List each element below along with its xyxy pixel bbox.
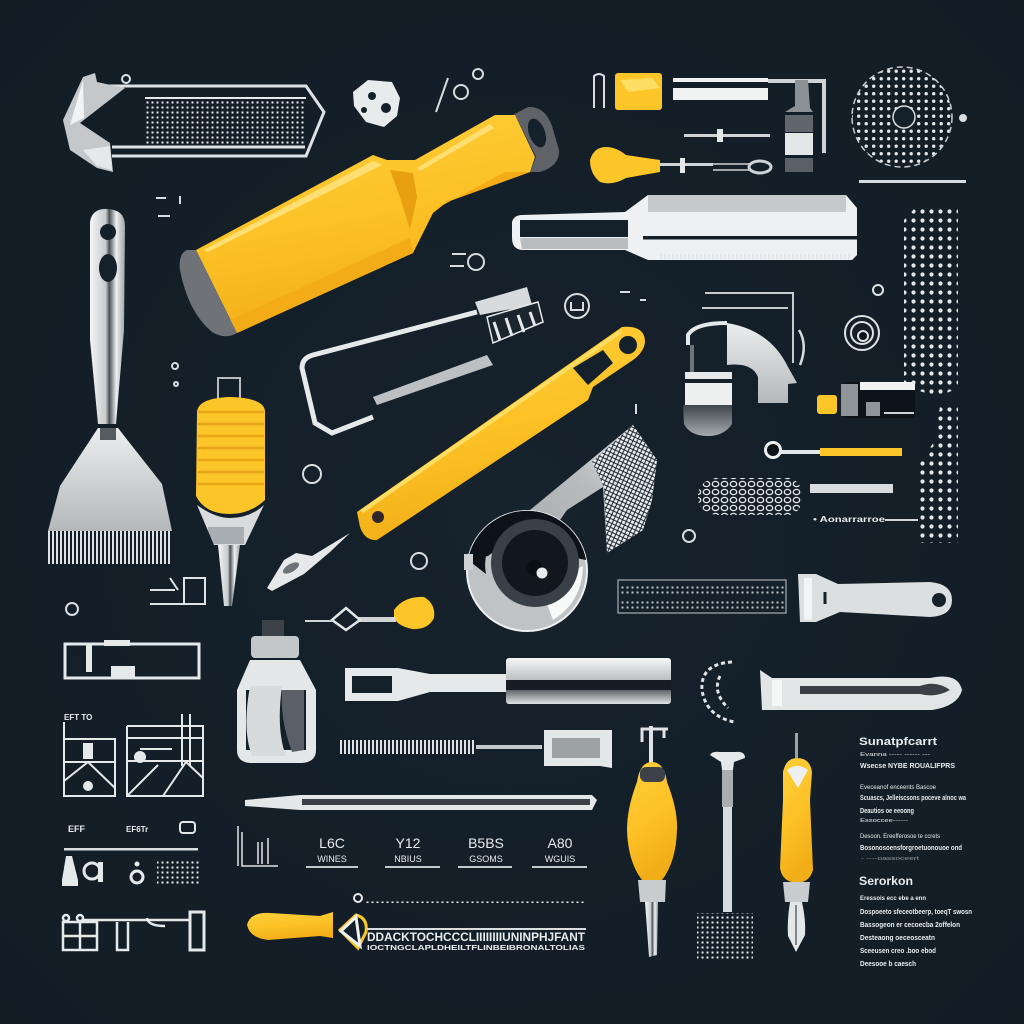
- text block: right column upper: Essoccee------: [860, 818, 908, 824]
- tool: scraper with loop: [798, 574, 952, 622]
- tool: yellow short handle with wedge: [247, 912, 586, 952]
- icon: small gear cluster: [353, 80, 400, 127]
- icon: coiled spring: [702, 662, 734, 722]
- small marks middle: [66, 196, 695, 615]
- stat 2: Y12: [396, 835, 421, 851]
- stat 4: A80: [548, 835, 573, 851]
- stat 4: [532, 835, 587, 868]
- tool: yellow grip tool B: [780, 733, 813, 952]
- stat 1: WINES: [317, 854, 347, 864]
- stat 2: NBIUS: [394, 854, 422, 864]
- text block: right column lower: Sceeusen creo .boo ebod: [860, 948, 936, 955]
- tool: small parts row: [590, 129, 771, 183]
- text block: right column upper: [859, 736, 966, 862]
- stat 4: WGUIS: [545, 854, 575, 864]
- stat 1: L6C: [319, 835, 345, 851]
- label: diagram caption: EFT TO: [64, 713, 92, 722]
- tool: bristle roller: • Aonarrarroe: [813, 515, 886, 524]
- icon row: legend chart: [62, 822, 200, 886]
- legend header icons: [64, 822, 198, 850]
- legend header icons: EFF: [68, 824, 86, 834]
- text block: right column upper: Desoon. Ereefferosoe te ccrets: [860, 833, 941, 840]
- diagrams: sketched frames: [64, 714, 203, 796]
- tool: long thin file: [245, 795, 597, 810]
- stat 2: [385, 835, 440, 868]
- tool: halftone vertical strips: [904, 208, 958, 543]
- tool: vertical metal spatula: [48, 209, 172, 564]
- text block: right column upper: Sunatpfcarrt: [859, 736, 937, 748]
- tool: yellow bulb probe: [305, 597, 434, 630]
- divider line: [859, 180, 966, 183]
- tool: long yellow handled knife: [357, 327, 645, 540]
- stat 3: B5BS: [468, 835, 504, 851]
- text block: right column lower: [859, 874, 972, 968]
- text block: right column lower: Dospoeeto sfeceotbeerp, toeqT swosn: [860, 909, 972, 916]
- text block: right column lower: Eressois ecc ebe a enn: [860, 896, 926, 902]
- tool: round halftone disc: [852, 67, 967, 167]
- tool: yellow short handle with wedge: DDACKTOCHCCCLIIIIIIIIUNINPHJFANT: [367, 932, 585, 944]
- tool: circular cutter with fan blade: [464, 425, 657, 631]
- text block: right column lower: Desteaong oeceosceatn: [860, 935, 935, 942]
- legend header icons: EF6Tr: [126, 825, 148, 834]
- tool: thin T tool with comb: [697, 752, 753, 959]
- tool: small clamp: [817, 382, 915, 418]
- tool: yellow grip tool A: [627, 726, 677, 957]
- tool: top-right yellow block and bar: [594, 73, 826, 153]
- stats row: [238, 826, 587, 868]
- tool: comb with blade: [340, 730, 612, 768]
- text block: right column upper: Wsecse NYBE ROUALIFPRS: [860, 763, 955, 770]
- text block: right column lower: Deesooe b caesch: [860, 961, 916, 968]
- tool: bristle roller: [698, 478, 918, 524]
- tool: small yellow probe: [766, 442, 902, 458]
- tool: yellow wrapped screwdriver: [196, 378, 265, 606]
- text block: right column lower: Bassogeon er cecoecba 2offelon: [860, 922, 960, 929]
- stat 3: [458, 835, 512, 868]
- text block: right column upper: - ----oassoceert: [861, 856, 920, 862]
- tool: top-left grater blade: [63, 73, 324, 172]
- tool: dotted ruler: [618, 580, 786, 613]
- tool: small parts left: [150, 578, 205, 604]
- diagram: bottom-left machine: [63, 912, 204, 950]
- text block: right column lower: Serorkon: [859, 874, 913, 888]
- icon: small marks: [436, 69, 483, 112]
- tool: flat pliers right: [760, 670, 962, 710]
- tool: hacksaw frame: [302, 287, 543, 433]
- legend small icons: [62, 856, 200, 886]
- tool: metal chisel right: [512, 195, 857, 260]
- tool: large metal chisel middle: [345, 658, 671, 704]
- text block: right column upper: Eveceanof enceents Bascoe: [860, 785, 937, 791]
- stat 1: [306, 835, 358, 868]
- text block: right column upper: Scuascs, Jelleiscsons poceve alnoc wa: [860, 795, 966, 802]
- tool: small bottle top right: [785, 80, 813, 172]
- dotted cord: [354, 894, 585, 903]
- tool: glass bottle: [237, 620, 316, 763]
- tool: large yellow handle: [180, 107, 559, 336]
- stat 3: GSOMS: [469, 854, 503, 864]
- text block: right column upper: Deautios oe eeoong: [860, 808, 914, 815]
- tool: yellow short handle with wedge: IOCTNGCLAPLDHEILTFLINBEIBRONALTOLIAS: [367, 943, 585, 952]
- tool: arch faucet fitting: [683, 293, 804, 436]
- diagram: bracket outline: [65, 640, 199, 678]
- icon: round spiral right: [845, 285, 883, 350]
- text block: right column upper: Evanna ----- ------ ---: [860, 752, 931, 758]
- text block: right column upper: Bosonosoensforgroetuonouoe ond: [860, 845, 962, 852]
- tool: pen nib: [267, 533, 350, 591]
- stat icon: [238, 826, 278, 866]
